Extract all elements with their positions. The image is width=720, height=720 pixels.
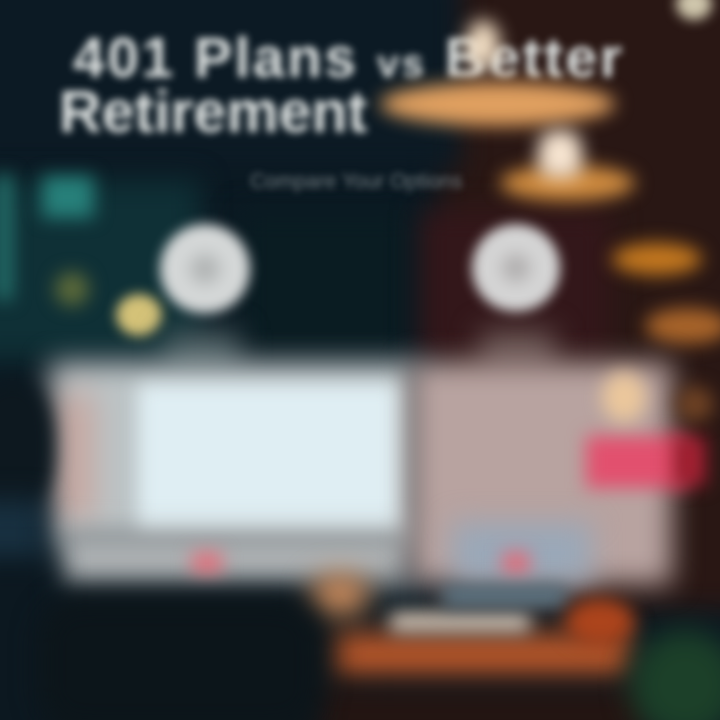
- warm glow: [602, 372, 646, 422]
- panel: stems above panels right: [480, 330, 555, 370]
- icon glyph right: [502, 254, 530, 282]
- lamp glow upper: [466, 20, 500, 70]
- icon: small olive coin: [55, 272, 89, 306]
- desk light strip: [390, 612, 530, 632]
- teal window lights: [0, 175, 12, 300]
- icon: yellow coin: [116, 294, 162, 336]
- corner light: [676, 0, 712, 20]
- orange object: [565, 598, 635, 646]
- background: maroon right wall: [420, 210, 610, 360]
- panel: stems above panels left: [165, 330, 240, 370]
- plant: [630, 630, 720, 720]
- panel: right comparison: [410, 362, 672, 584]
- left panel light table: [138, 384, 398, 530]
- person arm: [40, 600, 320, 720]
- left panel pink edge: [58, 392, 93, 522]
- right panel blue screen: [452, 522, 592, 584]
- desk orange: [335, 632, 630, 678]
- orange wall light: [612, 243, 702, 275]
- background: warm right side: [440, 0, 720, 610]
- left panel red button: [192, 552, 222, 574]
- warm glow right: [676, 386, 714, 422]
- icon: right circle: [472, 224, 560, 312]
- red edge: [672, 436, 706, 486]
- orange wall light lower: [645, 308, 720, 344]
- person silhouette shoulder: [0, 500, 45, 570]
- person silhouette head: [0, 380, 54, 515]
- lamp bulb lower: [538, 130, 582, 178]
- laptop: [442, 584, 567, 608]
- icon glyph left: [190, 254, 220, 284]
- background: teal left wall: [0, 180, 200, 360]
- background: dark centre wall: [240, 210, 410, 360]
- bottom strip: [320, 686, 650, 720]
- teal window light second: [42, 176, 94, 218]
- pink callout: [586, 436, 686, 488]
- ceiling lamp top: [380, 82, 615, 126]
- title line 1: 401 Plans vs Better: [73, 26, 624, 90]
- panel: left comparison: [50, 362, 414, 542]
- ceiling lamp lower: [500, 165, 635, 201]
- dark floor: [0, 596, 360, 720]
- person silhouette body: [0, 560, 55, 720]
- right panel red button: [503, 552, 529, 574]
- left panel footer: [58, 530, 410, 585]
- title line 2: Retirement: [59, 79, 367, 145]
- subtitle: Compare Your Options: [250, 170, 462, 193]
- background: dark upper band: [0, 0, 460, 170]
- hand: [310, 572, 370, 616]
- icon: left circle: [160, 224, 250, 314]
- title: [56, 26, 627, 145]
